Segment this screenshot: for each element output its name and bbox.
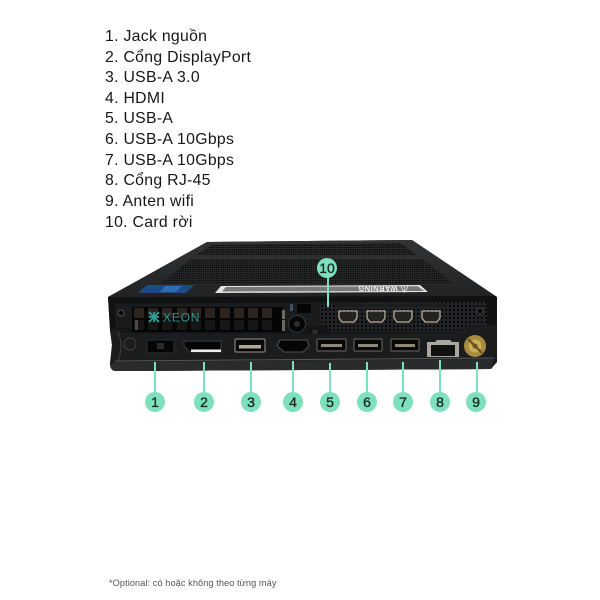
number badges: 3 — [247, 394, 255, 410]
list of ports: 1. Jack nguồn — [105, 28, 207, 45]
footnote: *Optional: có hoặc không theo từng máy — [109, 578, 277, 588]
connector lines — [155, 270, 477, 395]
watermark: XEON — [163, 310, 200, 324]
power button and LED — [290, 304, 311, 313]
top cover — [108, 240, 497, 297]
warning text: ⚠ WARNING — [358, 284, 408, 293]
power screw hole — [118, 310, 124, 316]
lock slot — [124, 338, 136, 350]
lower chassis — [110, 325, 496, 371]
blue sticker — [138, 285, 194, 293]
list of ports: 4. HDMI — [105, 90, 165, 107]
screw — [288, 316, 306, 332]
port: USB-A 10Gbps — [354, 339, 382, 351]
number badges: 8 — [436, 394, 444, 410]
list of ports: 3. USB-A 3.0 — [105, 69, 200, 86]
chassis silhouette — [108, 240, 497, 371]
port: USB-A 3.0 — [235, 339, 265, 352]
number badges: 4 — [289, 394, 297, 410]
port: DisplayPort — [184, 341, 221, 352]
number badges: 2 — [200, 394, 208, 410]
vent grille — [132, 307, 285, 332]
list of ports — [105, 28, 251, 231]
list of ports: 9. Anten wifi — [105, 193, 194, 210]
port: USB-A — [317, 339, 346, 351]
port: HDMI — [277, 340, 309, 352]
number badges: 6 — [363, 394, 371, 410]
list of ports: 8. Cổng RJ-45 — [105, 171, 211, 189]
list of ports: 5. USB-A — [105, 110, 173, 127]
list of ports: 6. USB-A 10Gbps — [105, 131, 234, 148]
port: wifi antenna — [464, 335, 486, 357]
specification label — [215, 285, 428, 293]
port: USB-A 10Gbps — [391, 339, 419, 351]
card panel — [320, 301, 487, 332]
list of ports: 10. Card rời — [105, 214, 193, 231]
number badges: 7 — [399, 394, 407, 410]
number badges: 5 — [326, 394, 334, 410]
number badges: 10 — [319, 260, 335, 276]
number badges — [145, 258, 486, 412]
list of ports: 7. USB-A 10Gbps — [105, 152, 234, 169]
upper front panel — [108, 296, 497, 328]
port: power jack — [147, 340, 174, 353]
number badges: 1 — [151, 394, 159, 410]
list of ports: 2. Cổng DisplayPort — [105, 48, 251, 66]
mini PC device — [108, 240, 497, 371]
number badges: 9 — [472, 394, 480, 410]
port: RJ-45 — [427, 340, 459, 357]
mini DisplayPorts — [339, 311, 440, 322]
